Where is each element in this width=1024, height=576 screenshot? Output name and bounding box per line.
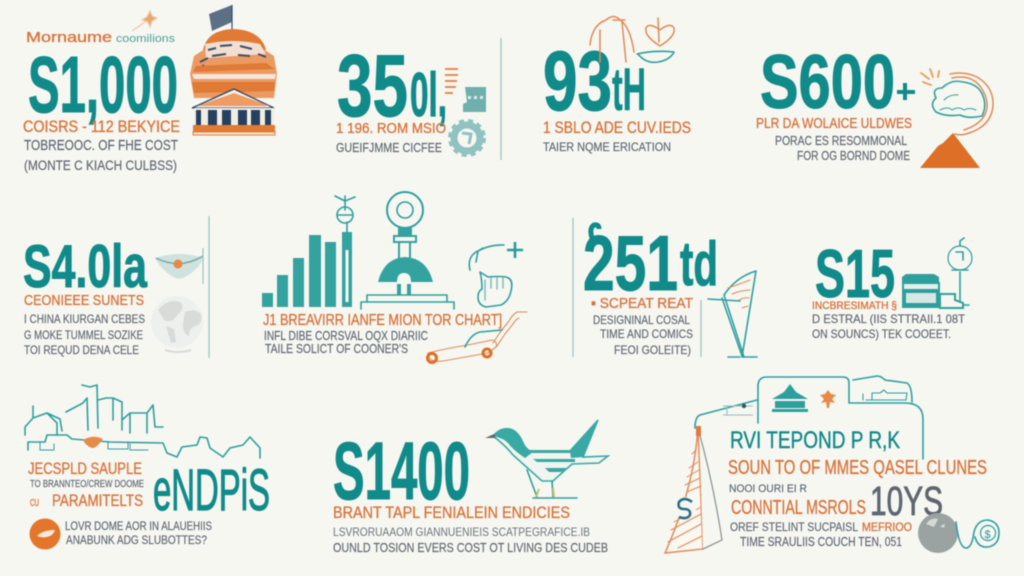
- stat word: eNDPiS: [153, 458, 270, 523]
- stat label: COISRS - 112 BEKYICE: [23, 117, 180, 136]
- panel: 93th stat: [543, 16, 691, 154]
- panel: park and sail: [665, 376, 999, 553]
- stat number: 251: [583, 219, 678, 307]
- icon: hand with plus: [469, 242, 523, 307]
- stat number: S4.0la: [23, 233, 147, 300]
- icon: orange circle: [30, 518, 60, 550]
- device dot: [742, 404, 746, 408]
- stat number: S15: [815, 236, 895, 312]
- icon: small device: [723, 406, 753, 415]
- icon: dollar swirl: $: [984, 529, 991, 541]
- panel: 1400 stat: [333, 420, 608, 555]
- icon: sail: [665, 426, 722, 553]
- stat label: J1 BREAVIRR IANFE MION TOR CHART]: [263, 312, 502, 329]
- description line 1: D ESTRAL (IIS STTRAII.1 08T: [812, 312, 966, 326]
- icon: cloud, sun and mountain: [920, 69, 993, 168]
- description line 2: G MOKE TUMMEL SOZIKE: [24, 328, 143, 342]
- description line 2: (MONTE C KIACH CULBSS): [24, 157, 177, 173]
- icon: harp sail: [708, 271, 757, 357]
- stat label: 1 196. ROM MSIO: [336, 120, 446, 137]
- description line 2: ON SOUNCS) TEK COOEET.: [812, 327, 951, 341]
- stat label: ▪ SCPEAT REAT: [591, 295, 693, 312]
- icon: star: [132, 11, 157, 31]
- bar chart: [262, 235, 336, 307]
- panel: 600 plus stat: [756, 40, 993, 168]
- heading: monument: Mornaume: [26, 29, 112, 46]
- gray stat: 10YS: [870, 478, 943, 524]
- icon: small orange bowl: [83, 437, 103, 448]
- description line 1: I CHINA KIURGAN CEBES: [24, 312, 145, 326]
- icon: building: [463, 87, 486, 112]
- stat label: INCBRESIMATH §: [812, 300, 897, 312]
- icon: small building: [863, 390, 907, 400]
- panel: 251td stat: [583, 219, 757, 357]
- orange line: CONNTIAL MSROLS: [731, 497, 866, 519]
- stat number: 93: [543, 34, 612, 128]
- description line 1: TOBREOOC. OF FHE COST: [24, 137, 178, 154]
- description line 2: TIME SRAULIIS COUCH TEN, 051: [740, 534, 902, 549]
- icon: capitol building: [190, 5, 277, 135]
- stat label: BRANT TAPL FENIALEIN ENDICIES: [333, 503, 570, 522]
- icon: bird: [485, 420, 608, 498]
- description line 1: INFL DIBE CORSVAL OQX DIARIIC: [264, 328, 428, 343]
- panel: 35 stat: [336, 36, 486, 155]
- description line 2: OUNLD TOSION EVERS COST OT LIVING DES CUDEB: [333, 540, 608, 555]
- description line 1: OREF STELINT SUCPAISL: [730, 520, 858, 534]
- icon: outline frame: [695, 376, 923, 459]
- stat label: 1 SBLO ADE CUV.IEDS: [543, 118, 691, 137]
- label word: PARAMITELTS: [52, 491, 143, 510]
- small text: NOOI OURI EI R: [729, 483, 807, 495]
- stat number: S600: [760, 40, 895, 125]
- stat suffix: td: [680, 230, 718, 299]
- description line 3: TOI REQUD DENA CELE: [24, 343, 139, 357]
- orange note: MEFRIOO: [862, 520, 912, 534]
- stat label: JECSPLD SAUPLE: [28, 459, 142, 478]
- description: GUEIFJMME CICFEE: [336, 140, 442, 155]
- panel: skyline endpoints: [25, 385, 270, 550]
- icon: dome and heart bowl: [590, 16, 674, 62]
- stat label: PLR DA WOLAICE ULDWES: [756, 115, 912, 132]
- stat number: S1,000: [28, 40, 178, 129]
- sub label: TO BRANNTEO/CREW DOOME: [30, 479, 144, 490]
- description line 1: LOVR DOME AOR IN ALAUEHIIS: [65, 519, 212, 533]
- stat suffix: 0l,: [410, 61, 447, 130]
- plus sign: [897, 83, 915, 100]
- panel: 4.0la stat: [23, 233, 203, 357]
- panel: monument cost: [23, 5, 277, 173]
- description line 3: FEOI GOLEITE): [614, 343, 691, 357]
- description line 2: TIME AND COMICS: [600, 327, 693, 341]
- description line 1: LSVRORUAAOM GIANNUENIEIS SCATPEGRAFICE.IB: [333, 525, 590, 539]
- small prefix: CU: [30, 498, 39, 509]
- icon: city skyline: [25, 385, 260, 458]
- icon: gear: [450, 121, 484, 155]
- icon: bowl and globe: [151, 248, 203, 352]
- icon: gray sphere: [918, 513, 958, 553]
- description line 2: ANABUNK ADG SLUBOTTES?: [66, 533, 207, 547]
- description line 2: TAILE SOLICT OF COONER'S: [265, 341, 408, 356]
- description line 1: DESIGNINAL COSAL: [593, 313, 690, 327]
- stat suffix: tH: [612, 56, 646, 123]
- description line 2: FOR OG BORND DOME: [797, 148, 910, 163]
- icon: tower: [335, 196, 355, 307]
- stat number: 35: [337, 36, 408, 135]
- panel: bar chart and landmark: [262, 192, 527, 362]
- panel: 15 stat: [812, 236, 972, 341]
- description: TAIER NQME ERICATION: [543, 140, 671, 154]
- heading: RVI TEPOND P R,K: [730, 427, 900, 454]
- icon: car: [428, 312, 527, 362]
- currency curl: [591, 225, 599, 238]
- icon: temple: [772, 384, 808, 412]
- icon: monument with dome: [361, 192, 454, 309]
- heading: teal suffix: coomilions: [116, 33, 176, 45]
- icon: orange stripes: [445, 69, 458, 93]
- description line 1: PORAC ES RESOMMONAL: [775, 133, 907, 148]
- icon: building and lamp: [902, 238, 972, 308]
- stat number: S1400: [333, 426, 470, 517]
- stat label: CEONIEEE SUNETS: [24, 292, 144, 309]
- icon: orange flower: [820, 390, 836, 408]
- icon: dollar swirl: [956, 520, 999, 548]
